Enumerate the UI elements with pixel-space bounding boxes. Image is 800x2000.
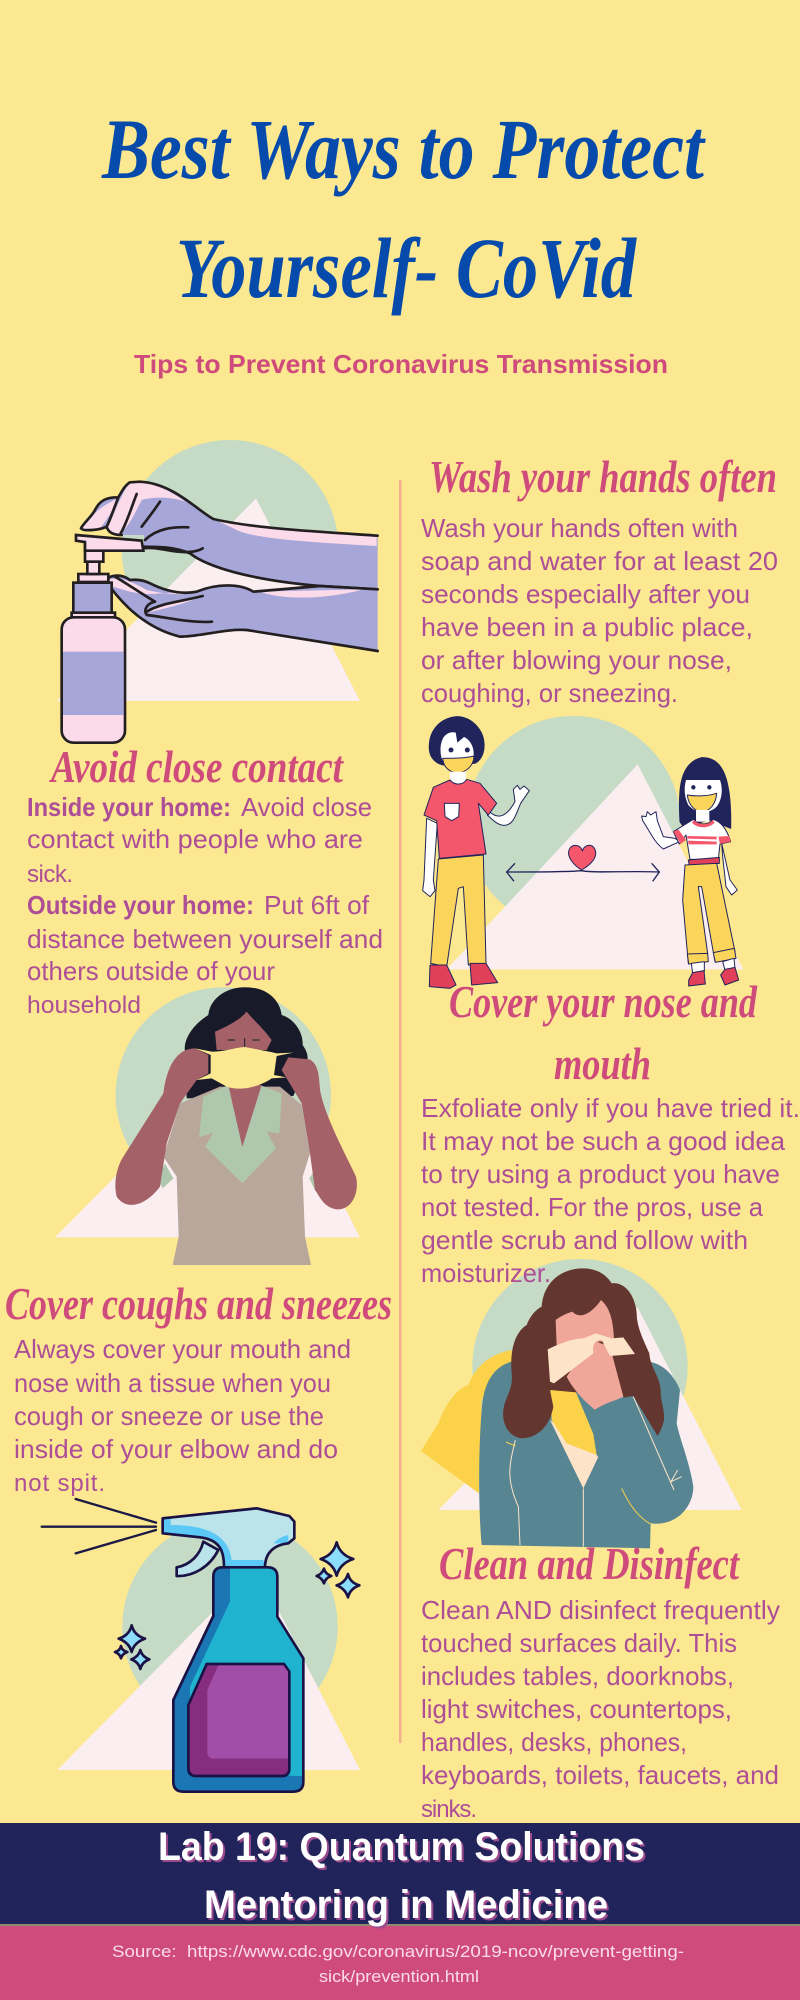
blouse [163,1087,311,1265]
text: moisturizer line: moisturizer. [421,1258,551,1288]
text block: cover coughs and sneezes: inside of your elbow and do [14,1434,338,1464]
text block: wash your hands: seconds especially after you [421,579,750,609]
text block: avoid close contact: contact with people who are [27,824,363,854]
hand [567,1340,623,1410]
lower hand [105,576,378,651]
inner shirt [550,1420,600,1488]
hair [503,1268,664,1440]
illustration: two people distancing [423,716,743,988]
trigger [177,1542,218,1576]
footer title second line: Mentoring in Medicine [204,1883,608,1927]
person: girl with mask [642,758,739,986]
spray lines [42,1499,156,1553]
subtitle: Tips to Prevent Coronavirus Transmission [134,349,668,379]
backdrop triangle [55,1035,360,1237]
bottle body [173,1567,303,1792]
footer band: source [0,1926,800,2000]
text block: cover coughs and sneezes: not spit. [14,1470,105,1497]
bottle label [188,1664,289,1776]
text block: cover coughs and sneezes: cough or sneeze or use the [14,1401,324,1431]
left arm [115,1048,208,1205]
title [101,101,707,316]
text block: wash your hands: coughing, or sneezing. [421,678,678,708]
upper hand [81,482,378,589]
text block: wash your hands: have been in a public place, [421,612,753,642]
sanitizer bottle [62,535,143,743]
text block: avoid close contact: distance between yourself and [27,924,383,954]
illustration: hands and sanitizer pump [57,440,378,743]
scarf [421,1350,512,1493]
face [215,1012,272,1050]
footer band: source: Source: https://www.cdc.gov/coronavirus/2019-ncov/prevent-getting- [112,1942,684,1961]
face [556,1300,614,1347]
tissue [548,1333,635,1383]
text block: cover your nose and mouth: to try using a product you have [421,1159,780,1189]
text block: clean and disinfect: sinks. [421,1796,477,1823]
backdrop circle [472,1259,688,1474]
text block: cover coughs and sneezes: Always cover your mouth and [14,1334,351,1364]
footer band: lab name: Lab 19: Quantum Solutions [158,1825,645,1869]
text block: clean and disinfect [421,1595,780,1823]
title: Yourself- CoVid [176,220,638,316]
illustration: woman sneezing into tissue [421,1259,742,1548]
jacket [479,1362,693,1548]
text block: avoid close contact: sick. [27,861,73,888]
text block: wash your hands: soap and water for at least 20 [421,546,778,576]
text block: wash your hands: Wash your hands often with [421,513,738,543]
text block: cover coughs and sneezes [14,1334,351,1497]
text block: clean and disinfect: includes tables, doorknobs, [421,1661,734,1691]
footer band: source: sick/prevention.html [319,1967,479,1986]
text block: cover your nose and mouth: gentle scrub and follow with [421,1225,748,1255]
illustration: spray bottle [42,1499,360,1792]
text block: avoid close contact: Put 6ft of [264,890,370,920]
backdrop circle [466,716,681,931]
sparkles [115,1542,359,1669]
text block: cover your nose and mouth: not tested. For the pros, use a [421,1192,764,1222]
backdrop circle [122,440,338,657]
text block: clean and disinfect: handles, desks, phones, [421,1727,687,1757]
text block: cover your nose and mouth: It may not be such a good idea [421,1126,786,1156]
text block: cover your nose and mouth [421,1093,800,1255]
text block: wash your hands [421,513,778,708]
text block: avoid close contact: Outside your home: [27,890,254,920]
spray head [163,1508,294,1567]
text block: clean and disinfect: Clean AND disinfect frequently [421,1595,780,1625]
right arm [282,1057,357,1209]
text block: clean and disinfect: keyboards, toilets, faucets, and [421,1760,779,1790]
mask [195,1047,293,1089]
backdrop triangle [438,1307,742,1510]
backdrop triangle [57,1567,360,1770]
collar [157,1085,319,1191]
footer band: lab name [0,1823,800,1926]
panel heading: cover your nose and mouth: mouth [554,1039,651,1089]
panel heading: cover your nose and mouth [449,977,758,1089]
panel heading: cover coughs and sneezes: Cover coughs and sneezes [5,1279,392,1329]
text block: cover your nose and mouth: Exfoliate only if you have tried it. [421,1093,800,1123]
text block: avoid close contact [27,792,383,1019]
backdrop triangle [447,764,743,969]
hair [185,987,308,1098]
text block: wash your hands: or after blowing your nose, [421,645,732,675]
sleeve [590,1396,693,1523]
text block: clean and disinfect: touched surfaces daily. This [421,1628,737,1658]
backdrop triangle [57,498,360,701]
jacket seams [506,1397,682,1547]
distance arrow with heart [507,845,659,881]
backdrop circle [116,987,331,1203]
person: boy with mask [423,717,529,988]
text block: clean and disinfect: light switches, countertops, [421,1694,732,1724]
text block: avoid close contact: household [27,992,141,1019]
panel heading: clean and disinfect: Clean and Disinfect [439,1539,740,1589]
eyes [228,1038,260,1047]
backdrop circle [122,1519,338,1734]
illustration: woman putting on a mask [55,987,360,1265]
text block: avoid close contact: others outside of your [27,956,275,986]
text block: avoid close contact: Inside your home: [27,792,231,822]
text block: cover coughs and sneezes: nose with a tissue when you [14,1368,331,1398]
text block: avoid close contact: Avoid close [241,792,372,822]
panel heading: avoid close contact: Avoid close contact [49,742,344,792]
